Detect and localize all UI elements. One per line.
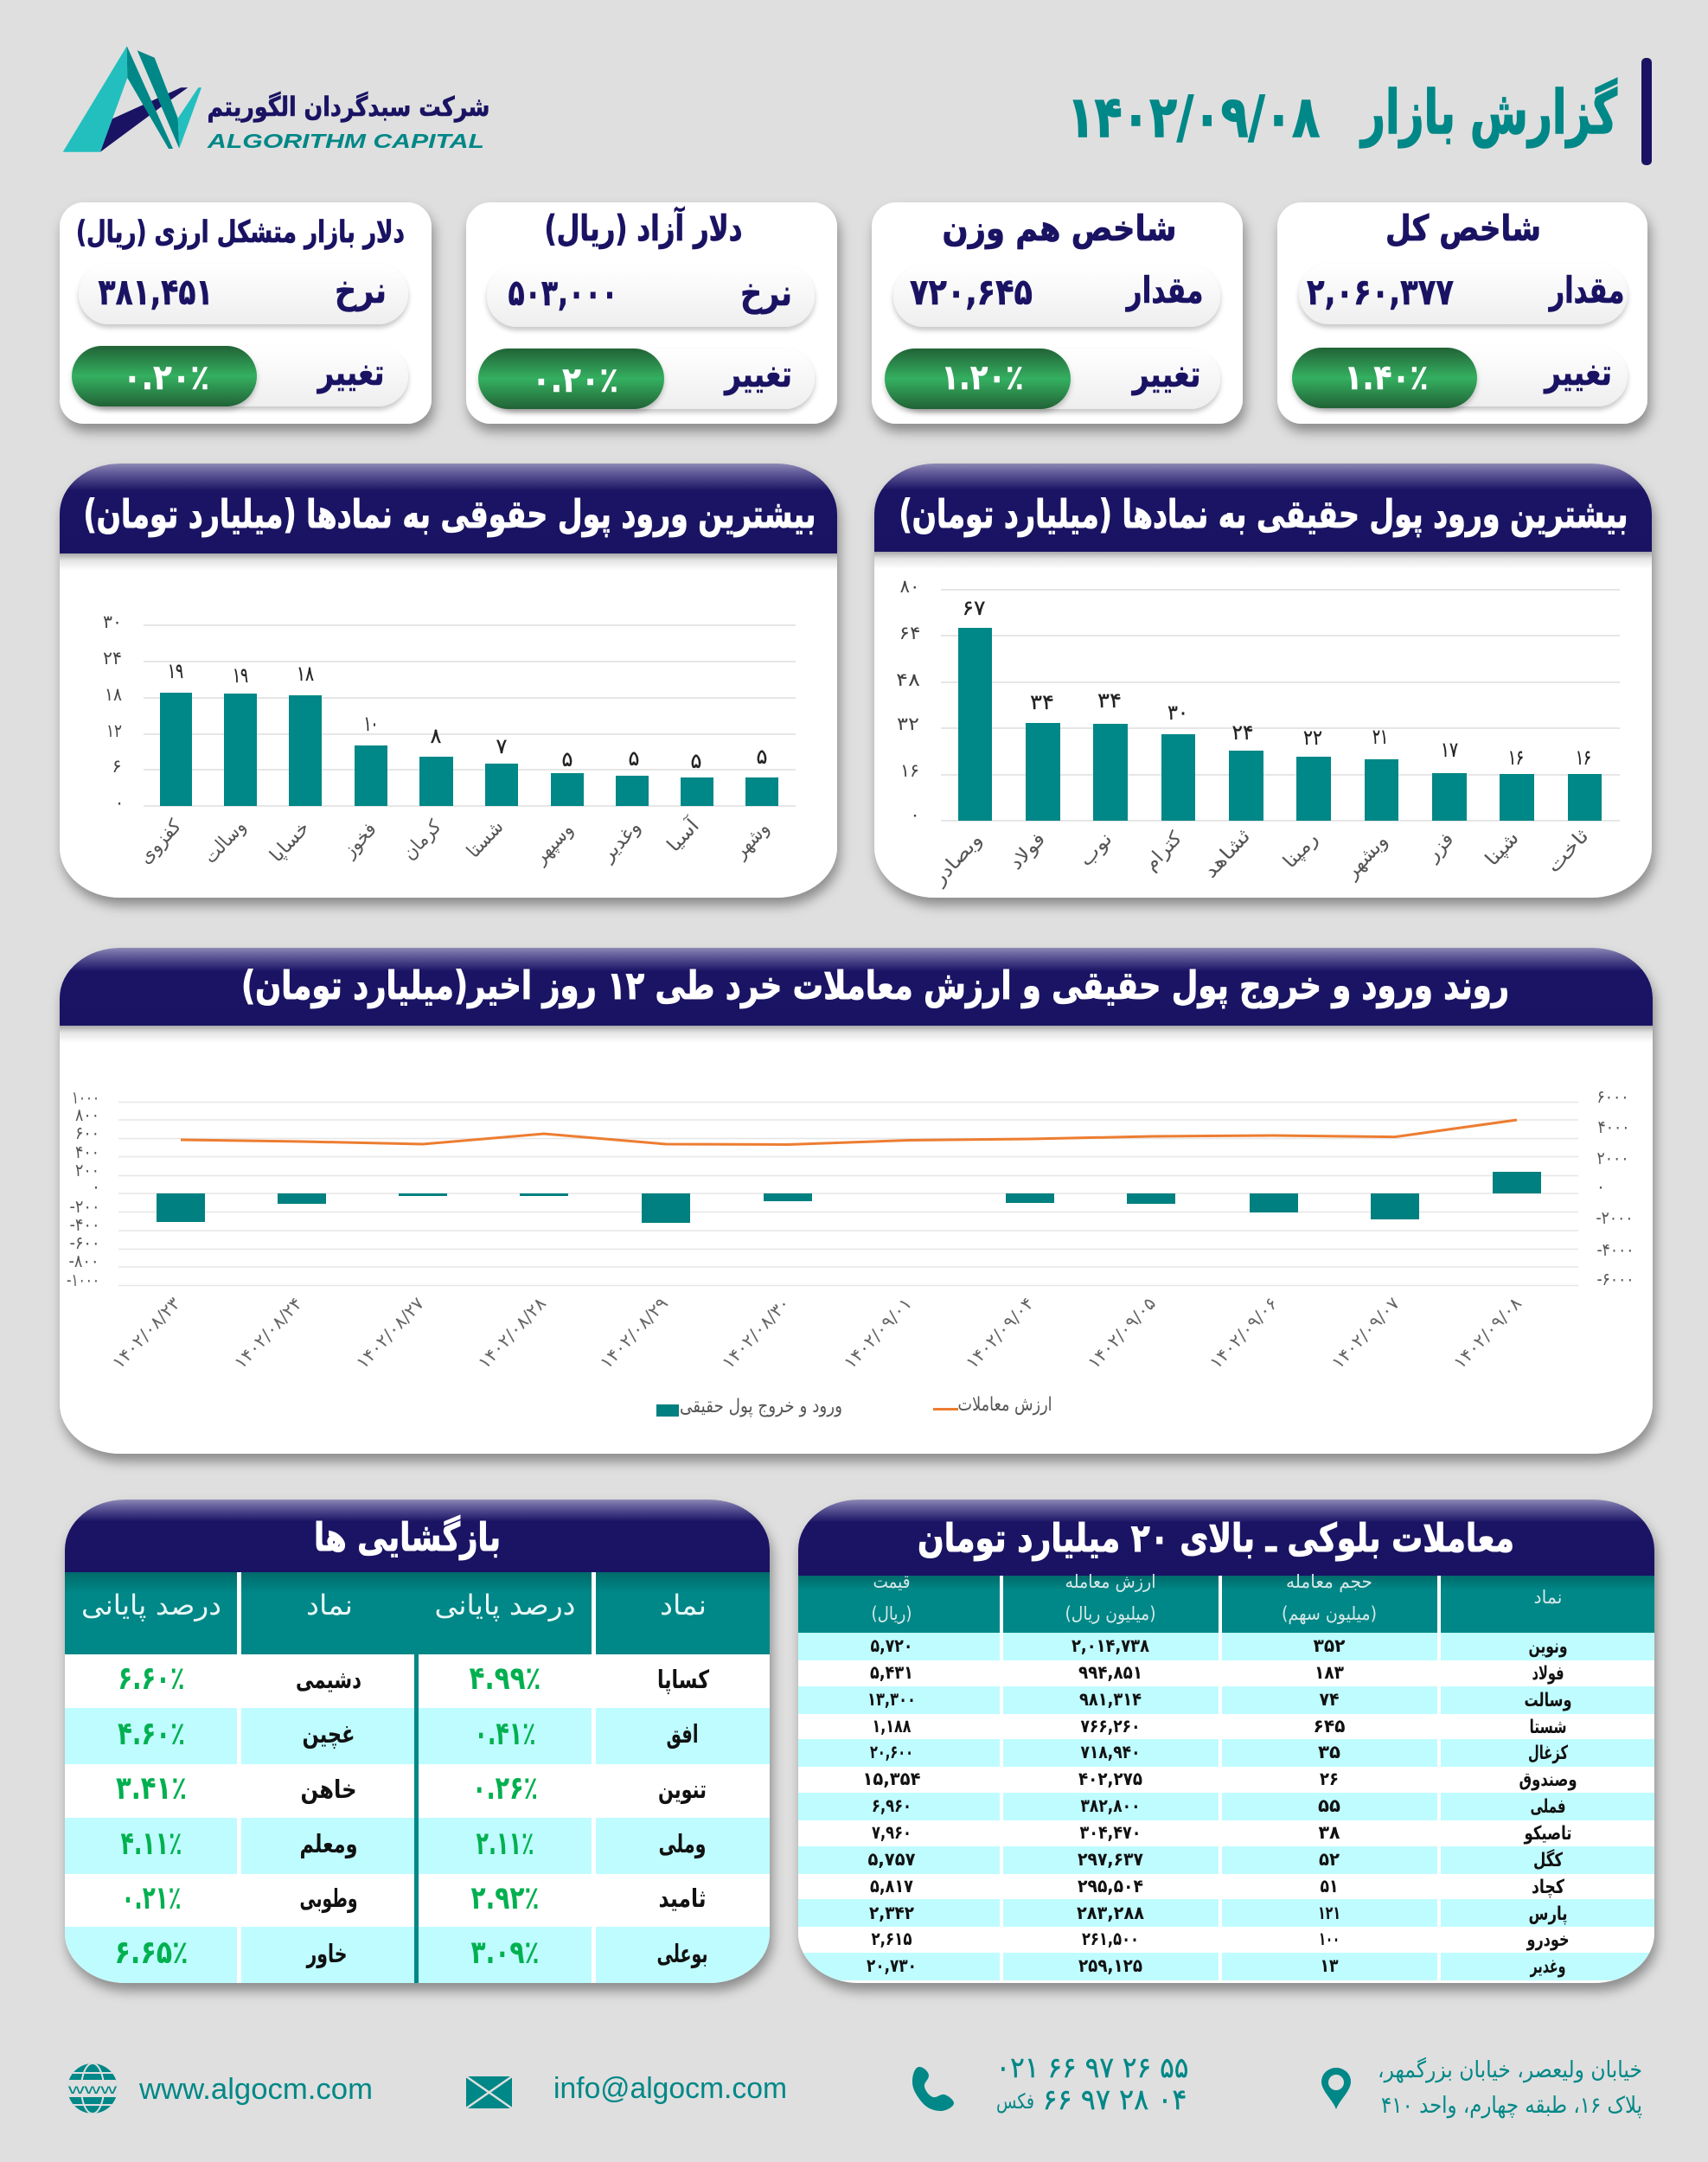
panel: 12-day flow and retail trade value chart: ۸۰۰ bbox=[75, 1104, 99, 1125]
panel: opening returns table: ۶.۶۰٪ bbox=[118, 1660, 185, 1697]
card: equal weight index: ۷۲۰,۶۴۵ bbox=[910, 271, 1033, 313]
panel: opening returns table: ۲.۹۲٪ bbox=[470, 1879, 540, 1916]
panel: opening returns table: دشیمی bbox=[296, 1665, 361, 1694]
panel: 12-day flow and retail trade value chart: ۱۴۰۲/۰۸/۲۹ bbox=[596, 1293, 672, 1372]
panel: 12-day flow and retail trade value chart: -۱۰۰۰ bbox=[67, 1270, 99, 1290]
panel: block trades table: ۳۸۲,۸۰۰ bbox=[1081, 1795, 1140, 1816]
panel: block trades table: فملی bbox=[1531, 1796, 1565, 1818]
panel: 12-day flow and retail trade value chart: -۶۰۰۰ bbox=[1596, 1269, 1634, 1289]
card: total index: مقدار bbox=[1548, 269, 1624, 311]
panel: 12-day flow and retail trade value chart: ۰ bbox=[1596, 1176, 1605, 1197]
card: total index: شاخص کل bbox=[1385, 208, 1541, 249]
panel: real money inflow: وبصادر bbox=[928, 829, 987, 890]
panel: 12-day flow and retail trade value chart: ۲۰۰ bbox=[75, 1160, 99, 1180]
panel: block trades table: ۵۵ bbox=[1318, 1795, 1340, 1816]
panel: real money inflow: ۲۴ bbox=[1231, 720, 1254, 745]
card: equal weight index bbox=[872, 202, 1243, 424]
panel: real money inflow: ۲۲ bbox=[1303, 726, 1322, 750]
panel: 12-day flow and retail trade value chart: -۲۰۰۰ bbox=[1596, 1207, 1633, 1228]
panel: 12-day flow and retail trade value chart: ۱۴۰۲/۰۹/۰۷ bbox=[1327, 1293, 1404, 1372]
panel: 12-day flow and retail trade value chart: ورود و خروج پول حقیقی bbox=[680, 1396, 842, 1417]
panel: legal money inflow: ۱۹ bbox=[233, 663, 248, 688]
panel: block trades table: وغدیر bbox=[1530, 1956, 1565, 1978]
panel: block trades table: ۲۰,۷۳۰ bbox=[867, 1955, 917, 1976]
panel: block trades table: ۷۶۶,۲۶۰ bbox=[1081, 1716, 1140, 1737]
panel: block trades table: پارس bbox=[1529, 1903, 1567, 1925]
panel: legal money inflow: وسالت bbox=[200, 816, 251, 868]
panel: block trades table: ۱۰۰ bbox=[1319, 1929, 1340, 1949]
footer: address: خیابان ولیعصر، خیابان بزرگمهر، bbox=[1378, 2056, 1642, 2083]
panel: opening returns table: ۰.۲۱٪ bbox=[121, 1879, 182, 1916]
panel: block trades table: ۱۲۱ bbox=[1318, 1903, 1340, 1923]
panel: opening returns table: خاهن bbox=[301, 1775, 356, 1804]
footer: phone and fax: ۰۲۱ ۶۶ ۹۷ ۲۶ ۵۵ bbox=[996, 2050, 1188, 2084]
card: organized FX market dollar bbox=[60, 202, 432, 424]
panel: block trades table: ارزش معامله bbox=[1065, 1571, 1155, 1592]
panel: block trades table: ۱۸۳ bbox=[1315, 1662, 1344, 1683]
panel: real money inflow: ۶۴ bbox=[899, 623, 920, 643]
panel: real money inflow: ۳۴ bbox=[1097, 688, 1122, 713]
panel: block trades table: ۴۰۲,۲۷۵ bbox=[1078, 1769, 1142, 1789]
panel: legal money inflow: ۱۰ bbox=[364, 712, 378, 736]
panel: block trades table: ۵۱ bbox=[1320, 1876, 1339, 1897]
panel: 12-day flow and retail trade value chart: ۱۴۰۲/۰۸/۳۰ bbox=[718, 1293, 794, 1372]
panel: legal money inflow: آسیا bbox=[662, 814, 704, 856]
panel: 12-day flow and retail trade value chart: ۲۰۰۰ bbox=[1596, 1148, 1629, 1168]
footer: phone and fax bbox=[912, 2050, 1188, 2116]
panel: opening returns table: ۳.۰۹٪ bbox=[470, 1934, 540, 1971]
panel: 12-day flow and retail trade value chart: ۴۰۰ bbox=[75, 1142, 99, 1162]
panel: 12-day flow and retail trade value chart: ۱۴۰۲/۰۸/۲۸ bbox=[474, 1293, 550, 1372]
panel: block trades table: ۱۳ bbox=[1320, 1955, 1339, 1976]
panel: block trades table: ۵,۴۳۱ bbox=[870, 1662, 913, 1683]
card: free dollar: ۰.۲۰٪ bbox=[532, 361, 618, 400]
panel: real money inflow: فزر bbox=[1421, 828, 1458, 867]
panel: legal money inflow: ۲۴ bbox=[103, 648, 122, 668]
panel: 12-day flow and retail trade value chart: روند ورود و خروج پول حقیقی و ارزش معاملات خرد طی ۱۲ روز اخیر(میلیارد تومان) bbox=[241, 963, 1509, 1008]
panel: block trades table: ۲۰,۶۰۰ bbox=[870, 1742, 913, 1762]
panel: opening returns table: ۲.۱۱٪ bbox=[476, 1825, 534, 1862]
panel: block trades table: تاصیکو bbox=[1524, 1823, 1572, 1845]
panel: opening returns table: بازگشایی ها bbox=[314, 1514, 501, 1560]
card: organized FX market dollar: دلار بازار متشکل ارزی (ریال) bbox=[76, 215, 405, 250]
panel: opening returns table: ۴.۶۰٪ bbox=[118, 1715, 185, 1752]
panel: legal money inflow: ۷ bbox=[496, 734, 508, 758]
panel: real money inflow: ۴۸ bbox=[896, 669, 920, 690]
panel: 12-day flow and retail trade value chart: ۶۰۰۰ bbox=[1596, 1086, 1629, 1107]
footer: website: www.algocm.com bbox=[138, 2073, 373, 2106]
footer: address bbox=[1321, 2056, 1642, 2119]
panel: block trades table: ۷,۹۶۰ bbox=[872, 1822, 912, 1843]
panel: opening returns table: کساپا bbox=[657, 1665, 709, 1695]
panel: real money inflow: ۸۰ bbox=[899, 576, 920, 597]
panel: legal money inflow: ۸ bbox=[431, 724, 442, 748]
panel: opening returns table: غچین bbox=[303, 1719, 355, 1749]
panel: opening returns table: خاور bbox=[305, 1939, 348, 1968]
panel: 12-day flow and retail trade value chart: ۱۴۰۲/۰۹/۰۴ bbox=[962, 1293, 1038, 1372]
panel: opening returns table: نماد bbox=[660, 1589, 707, 1622]
footer: website bbox=[67, 2063, 373, 2114]
card: equal weight index: تغییر bbox=[1131, 353, 1200, 396]
panel: block trades table: (میلیون ریال) bbox=[1065, 1603, 1155, 1624]
panel: opening returns table: وطوبی bbox=[299, 1884, 358, 1913]
panel: legal money inflow: ۱۲ bbox=[106, 720, 122, 741]
panel: block trades table: ۵,۸۱۷ bbox=[870, 1876, 913, 1897]
footer: email: info@algocm.com bbox=[553, 2072, 787, 2105]
panel: block trades table: ۵,۷۲۰ bbox=[870, 1635, 913, 1656]
panel: block trades table: قیمت bbox=[873, 1571, 910, 1592]
panel: legal money inflow bbox=[60, 464, 837, 898]
card: equal weight index: مقدار bbox=[1125, 269, 1204, 311]
panel: 12-day flow and retail trade value chart: ۱۴۰۲/۰۹/۰۵ bbox=[1084, 1293, 1160, 1372]
panel: opening returns table: ۶.۶۵٪ bbox=[114, 1934, 189, 1971]
panel: block trades table: شستا bbox=[1529, 1717, 1567, 1738]
card: free dollar: ۵۰۳,۰۰۰ bbox=[509, 272, 617, 314]
panel: real money inflow: ۳۰ bbox=[1167, 700, 1188, 725]
card: total index: ۲,۰۶۰,۳۷۷ bbox=[1307, 271, 1454, 313]
panel: opening returns table: تنوین bbox=[658, 1775, 707, 1804]
panel: block trades table: ۲۹۷,۶۳۷ bbox=[1078, 1849, 1143, 1870]
panel: block trades table: ۲۶۱,۵۰۰ bbox=[1082, 1929, 1139, 1949]
panel: real money inflow: وبشهر bbox=[1340, 830, 1392, 884]
panel: real money inflow: ۱۷ bbox=[1441, 738, 1458, 762]
panel: legal money inflow: ۵ bbox=[629, 746, 639, 771]
title: ۱۴۰۲/۰۹/۰۸ bbox=[1067, 84, 1320, 150]
panel: legal money inflow: ۵ bbox=[691, 749, 701, 773]
panel: block trades table: وصندوق bbox=[1519, 1769, 1577, 1791]
panel: block trades table: ۹۸۱,۳۱۴ bbox=[1079, 1689, 1142, 1710]
panel: block trades table: ۹۹۴,۸۵۱ bbox=[1078, 1662, 1142, 1683]
panel: real money inflow: نوب bbox=[1075, 828, 1116, 871]
panel: 12-day flow and retail trade value chart: -۶۰۰ bbox=[69, 1232, 100, 1253]
panel: 12-day flow and retail trade value chart: ۱۴۰۲/۰۸/۲۳ bbox=[108, 1293, 184, 1372]
panel: real money inflow: ۱۶ bbox=[900, 760, 919, 781]
panel: block trades table: کزغال bbox=[1528, 1743, 1568, 1764]
panel: 12-day flow and retail trade value chart bbox=[60, 948, 1653, 1454]
panel: legal money inflow: ۵ bbox=[757, 745, 767, 769]
panel: block trades table: ونوین bbox=[1529, 1636, 1567, 1658]
panel: block trades table: ۲۸۳,۲۸۸ bbox=[1077, 1903, 1144, 1923]
panel: block trades table: کچاد bbox=[1532, 1877, 1564, 1898]
panel: block trades table: ۳۵۲ bbox=[1313, 1635, 1346, 1656]
card: organized FX market dollar: نرخ bbox=[335, 269, 387, 312]
panel: block trades table: حجم معامله bbox=[1286, 1571, 1372, 1593]
panel: opening returns table: ۳.۴۱٪ bbox=[116, 1769, 187, 1807]
panel: block trades table: ۲,۶۱۵ bbox=[872, 1929, 912, 1949]
card: organized FX market dollar: ۳۸۱,۴۵۱ bbox=[99, 271, 213, 313]
footer: address: پلاک ۱۶، طبقه چهارم، واحد ۴۱۰ bbox=[1381, 2093, 1642, 2119]
panel: real money inflow: ۳۴ bbox=[1030, 690, 1054, 714]
panel: legal money inflow: ۱۸ bbox=[297, 662, 314, 686]
panel: real money inflow: ۳۲ bbox=[897, 713, 919, 734]
panel: block trades table: ۳۸ bbox=[1318, 1822, 1340, 1843]
logo: ALGORITHM CAPITAL bbox=[207, 130, 484, 152]
panel: real money inflow: شپنا bbox=[1481, 828, 1524, 871]
card: equal weight index: ۱.۲۰٪ bbox=[941, 358, 1024, 398]
card: organized FX market dollar: تغییر bbox=[317, 351, 384, 394]
panel: 12-day flow and retail trade value chart: ۱۴۰۲/۰۹/۰۸ bbox=[1449, 1293, 1526, 1372]
panel: opening returns table: ثامید bbox=[659, 1884, 706, 1913]
panel: legal money inflow: ۱۹ bbox=[168, 659, 183, 683]
panel: legal money inflow: ۰ bbox=[114, 792, 125, 813]
panel: legal money inflow: کفزوی bbox=[135, 816, 186, 868]
panel: block trades table: معاملات بلوکی ـ بالای ۲۰ میلیارد تومان bbox=[918, 1515, 1514, 1561]
card: free dollar: دلار آزاد (ریال) bbox=[545, 207, 742, 249]
panel: block trades table: ۲۵۹,۱۲۵ bbox=[1078, 1955, 1142, 1976]
card: free dollar: نرخ bbox=[740, 272, 792, 315]
card: equal weight index: شاخص هم وزن bbox=[943, 208, 1176, 250]
panel: block trades table: (ریال) bbox=[872, 1603, 912, 1624]
panel: legal money inflow: شستا bbox=[463, 816, 508, 862]
panel: real money inflow: فولاد bbox=[1005, 828, 1050, 874]
card: free dollar bbox=[466, 202, 837, 424]
panel: legal money inflow: وسپهر bbox=[529, 819, 578, 869]
panel: real money inflow: ۱۶ bbox=[1508, 745, 1524, 770]
panel: legal money inflow: ۳۰ bbox=[103, 611, 122, 632]
panel: opening returns table bbox=[65, 1500, 770, 1983]
panel: 12-day flow and retail trade value chart: ۴۰۰۰ bbox=[1598, 1116, 1629, 1137]
card: total index: ۱.۴۰٪ bbox=[1344, 358, 1429, 398]
panel: block trades table bbox=[798, 1500, 1654, 1983]
card: total index: تغییر bbox=[1543, 351, 1612, 394]
panel: opening returns table: ۰.۲۶٪ bbox=[472, 1769, 538, 1807]
panel: opening returns table: ومعلم bbox=[299, 1829, 358, 1858]
panel: block trades table: ۱۳,۳۰۰ bbox=[867, 1689, 916, 1710]
panel: real money inflow: ثشاهد bbox=[1199, 826, 1255, 883]
panel: real money inflow: ۲۱ bbox=[1372, 725, 1388, 749]
panel: block trades table: ۱,۱۸۸ bbox=[872, 1716, 912, 1737]
panel: real money inflow: ۰ bbox=[910, 804, 920, 825]
panel: 12-day flow and retail trade value chart: ۱۴۰۲/۰۸/۲۴ bbox=[230, 1293, 306, 1372]
panel: 12-day flow and retail trade value chart: -۴۰۰۰ bbox=[1596, 1239, 1634, 1260]
card: free dollar: تغییر bbox=[723, 353, 792, 396]
panel: 12-day flow and retail trade value chart: -۴۰۰ bbox=[69, 1214, 100, 1235]
panel: opening returns table: درصد پایانی bbox=[434, 1589, 576, 1622]
panel: block trades table: ۶,۹۶۰ bbox=[872, 1795, 912, 1816]
panel: block trades table: خودرو bbox=[1526, 1929, 1569, 1951]
panel: block trades table: کگل bbox=[1533, 1848, 1563, 1871]
card: organized FX market dollar: ۰.۲۰٪ bbox=[123, 358, 209, 398]
panel: legal money inflow: ۱۸ bbox=[105, 684, 122, 705]
footer: phone and fax: فکس bbox=[996, 2089, 1034, 2114]
panel: legal money inflow: ۶ bbox=[112, 756, 122, 777]
panel: 12-day flow and retail trade value chart: ۱۰۰۰ bbox=[72, 1087, 99, 1108]
panel: legal money inflow: کرمان bbox=[399, 816, 446, 864]
panel: block trades table: (میلیون سهم) bbox=[1282, 1603, 1377, 1625]
panel: real money inflow: رمپنا bbox=[1279, 828, 1322, 873]
panel: opening returns table: نماد bbox=[306, 1589, 353, 1622]
panel: legal money inflow: وشهر bbox=[729, 817, 774, 863]
panel: opening returns table: ۰.۴۱٪ bbox=[474, 1715, 536, 1752]
panel: legal money inflow: فخوز bbox=[338, 819, 381, 862]
panel: block trades table: نماد bbox=[1534, 1587, 1562, 1608]
panel: opening returns table: ۴.۱۱٪ bbox=[121, 1825, 182, 1862]
panel: 12-day flow and retail trade value chart: ۱۴۰۲/۰۹/۰۶ bbox=[1206, 1293, 1282, 1372]
panel: block trades table: ۳۵ bbox=[1318, 1742, 1340, 1762]
panel: block trades table: ۷۱۸,۹۴۰ bbox=[1081, 1742, 1140, 1762]
panel: 12-day flow and retail trade value chart: ارزش معاملات bbox=[958, 1394, 1052, 1416]
panel: 12-day flow and retail trade value chart: ۶۰۰ bbox=[75, 1123, 99, 1143]
panel: block trades table: ۷۴ bbox=[1320, 1689, 1340, 1710]
panel: opening returns table: ۴.۹۹٪ bbox=[469, 1660, 541, 1697]
panel: 12-day flow and retail trade value chart: ۰ bbox=[92, 1176, 100, 1197]
card: total index bbox=[1277, 202, 1647, 424]
panel: block trades table: ۳۰۴,۴۷۰ bbox=[1079, 1822, 1142, 1843]
panel: block trades table: ۲۶ bbox=[1320, 1769, 1339, 1789]
panel: block trades table: ۶۴۵ bbox=[1313, 1716, 1346, 1737]
panel: block trades table: فولاد bbox=[1532, 1663, 1564, 1685]
panel: block trades table: ۱۵,۳۵۴ bbox=[863, 1769, 921, 1789]
panel: real money inflow: کترام bbox=[1140, 828, 1187, 875]
panel: opening returns table: وملی bbox=[659, 1829, 706, 1858]
panel: 12-day flow and retail trade value chart: ۱۴۰۲/۰۹/۰۱ bbox=[840, 1293, 916, 1372]
logo bbox=[63, 46, 489, 152]
panel: real money inflow bbox=[874, 464, 1652, 898]
panel: 12-day flow and retail trade value chart: -۸۰۰ bbox=[69, 1251, 99, 1271]
footer: email bbox=[466, 2072, 787, 2108]
panel: legal money inflow: خساپا bbox=[265, 817, 314, 867]
title bbox=[1067, 58, 1652, 165]
footer: website: www bbox=[67, 2082, 118, 2097]
footer: phone and fax: ۶۶ ۹۷ ۲۸ ۰۴ bbox=[1043, 2082, 1187, 2116]
logo: شرکت سبدگردان الگوریتم bbox=[208, 91, 489, 123]
panel: block trades table: ۲,۳۴۲ bbox=[869, 1903, 914, 1923]
panel: opening returns table: بوعلی bbox=[657, 1939, 707, 1968]
panel: 12-day flow and retail trade value chart: ۱۴۰۲/۰۸/۲۷ bbox=[352, 1293, 428, 1372]
panel: block trades table: ۲۹۵,۵۰۴ bbox=[1078, 1876, 1143, 1897]
panel: legal money inflow: ۵ bbox=[562, 747, 573, 771]
panel: legal money inflow: وغدیر bbox=[597, 816, 645, 867]
panel: block trades table: ۵,۷۵۷ bbox=[868, 1849, 916, 1870]
panel: real money inflow: ثاخت bbox=[1543, 825, 1594, 878]
panel: legal money inflow: بیشترین ورود پول حقوقی به نمادها (میلیارد تومان) bbox=[83, 491, 816, 537]
panel: block trades table: وسالت bbox=[1524, 1690, 1572, 1711]
panel: block trades table: ۵۲ bbox=[1319, 1849, 1340, 1870]
panel: opening returns table: درصد پایانی bbox=[81, 1589, 221, 1622]
panel: real money inflow: ۱۶ bbox=[1576, 745, 1591, 770]
panel: 12-day flow and retail trade value chart: -۲۰۰ bbox=[69, 1196, 100, 1217]
panel: block trades table: ۲,۰۱۴,۷۳۸ bbox=[1071, 1635, 1149, 1656]
panel: opening returns table: افق bbox=[666, 1719, 699, 1749]
panel: real money inflow: ۶۷ bbox=[962, 596, 986, 620]
